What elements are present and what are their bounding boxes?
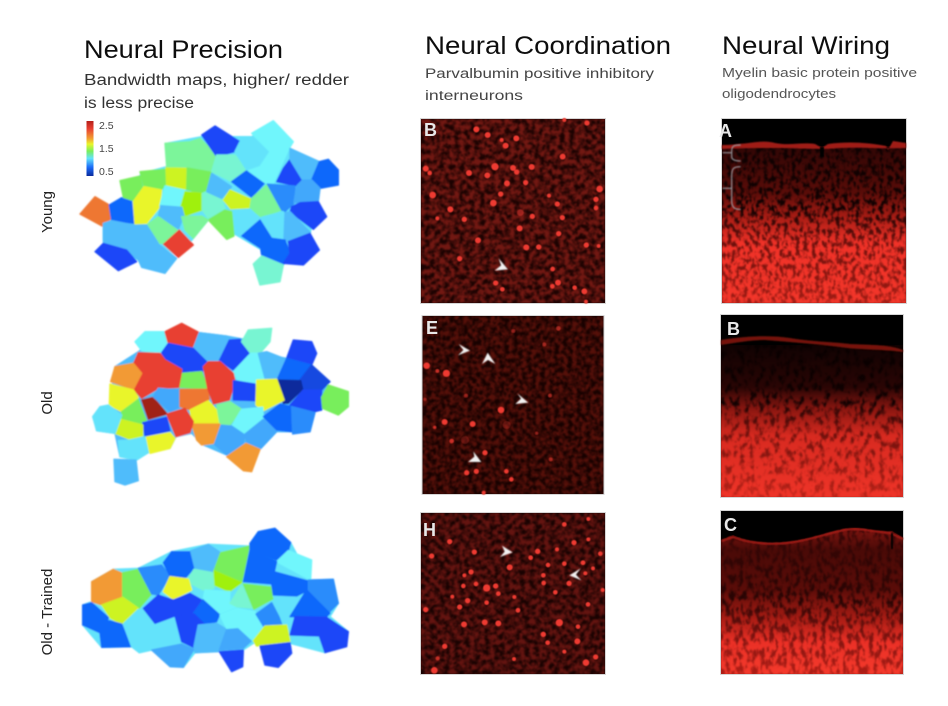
- legend: bandwidth colour scale: 1.5: [99, 143, 114, 155]
- bandwidth map: Old: [93, 323, 348, 485]
- text: Neural Wiring description: [722, 66, 917, 101]
- label: panel letter B: B: [727, 319, 740, 339]
- micrograph: Coordination B (young): [420, 118, 606, 304]
- legend: bandwidth colour scale: [86, 120, 114, 178]
- label: panel letter B: B: [424, 120, 437, 140]
- row label: Old: Old: [39, 391, 56, 415]
- arrowhead marker: [495, 258, 508, 271]
- heading: Neural Wiring: Neural Wiring: [722, 32, 890, 60]
- text: Neural Coordination description: interneurons: [425, 88, 523, 103]
- text: Neural Coordination description: [425, 66, 654, 103]
- heading: Neural Precision: Neural Precision: [84, 36, 283, 64]
- micrograph: Wiring A (young): [719, 118, 906, 304]
- row label: Young: Young: [39, 191, 56, 233]
- arrowhead markers: [458, 344, 528, 462]
- row label: Old - Trained: Old - Trained: [39, 569, 56, 655]
- label: panel letter E: E: [426, 318, 438, 338]
- legend: bandwidth colour scale: 2.5: [99, 120, 114, 132]
- micrograph: Wiring B (old): [720, 314, 904, 498]
- micrograph: Wiring C (old trained): [720, 510, 904, 674]
- arrowhead markers: [500, 546, 581, 580]
- label: panel letter H: H: [423, 520, 436, 540]
- heading: Neural Coordination: Neural Coordination: [425, 32, 671, 60]
- text: Neural Precision description: is less precise: [84, 95, 194, 112]
- text: Neural Wiring description: oligodendrocytes: [722, 87, 836, 101]
- bandwidth map: Young: [80, 121, 338, 285]
- bandwidth map: Old - Trained: [83, 528, 348, 672]
- text: Neural Coordination description: Parvalbumin positive inhibitory: [425, 66, 654, 81]
- text: Neural Precision description: Bandwidth maps, higher/ redder: [84, 72, 349, 89]
- legend: bandwidth colour scale: 0.5: [99, 166, 114, 178]
- layer brackets: [723, 145, 741, 209]
- micrograph: Coordination E (old): [422, 316, 604, 495]
- text: Neural Precision description: [84, 72, 349, 112]
- text: Neural Wiring description: Myelin basic protein positive: [722, 66, 917, 80]
- micrograph: Coordination H (old trained): [420, 512, 606, 674]
- label: panel letter C: C: [724, 515, 737, 535]
- label: panel letter A: A: [719, 121, 732, 141]
